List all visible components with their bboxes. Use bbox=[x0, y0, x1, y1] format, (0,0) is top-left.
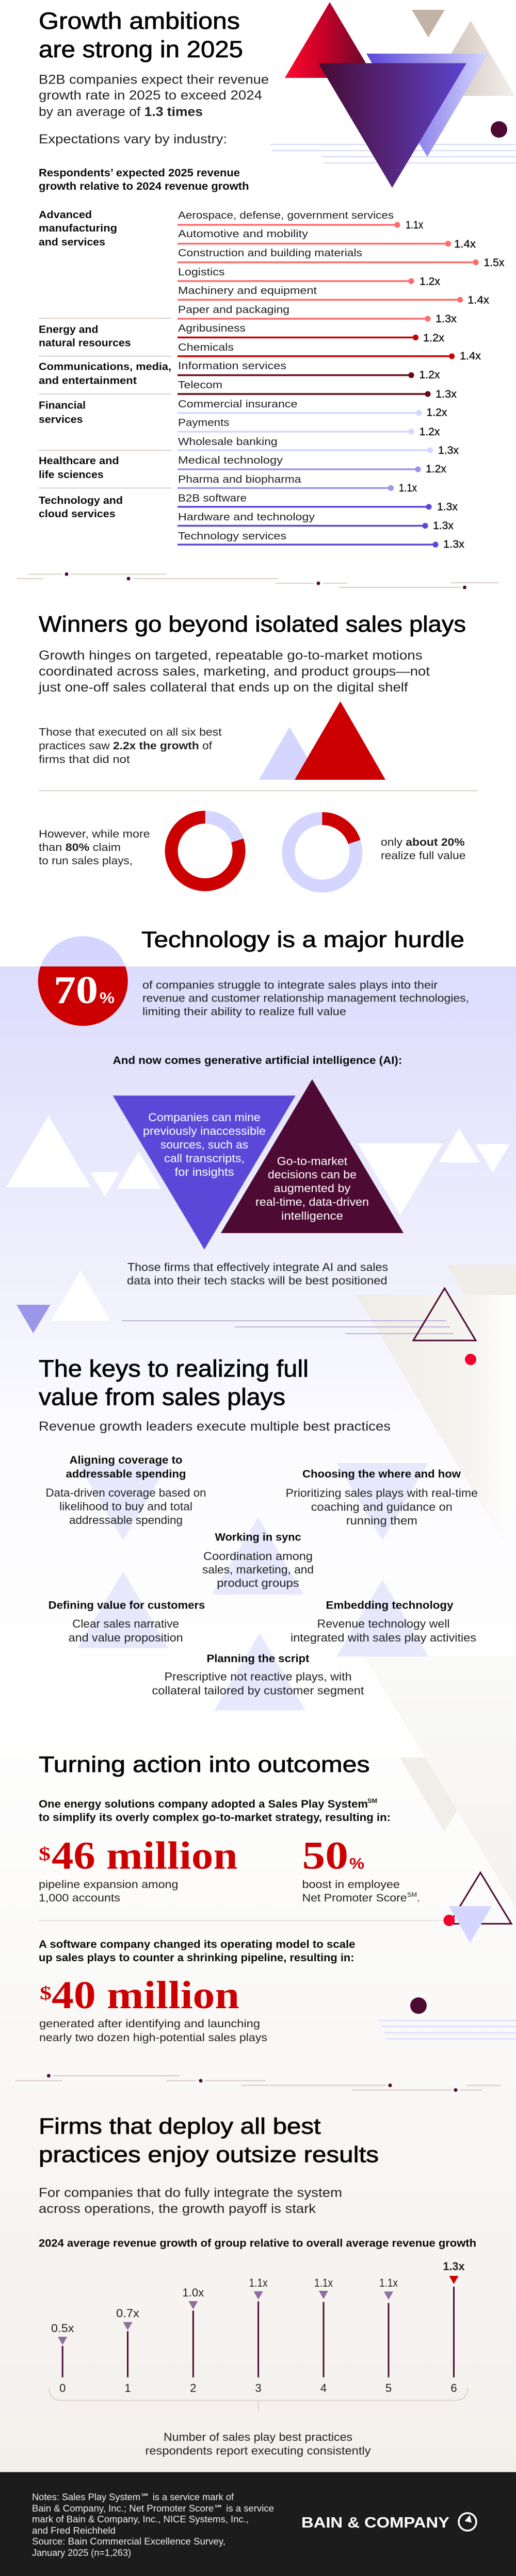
practice: aligning coverage bbox=[45, 1454, 206, 1527]
practice: defining value bbox=[49, 1600, 205, 1644]
triangles: growth comparison bbox=[259, 701, 385, 780]
text: 70 percent explanation: of companies struggle to integrate sales plays into their bbox=[142, 979, 438, 991]
row: chemicals: Chemicals bbox=[178, 342, 234, 353]
industry group labels: Healthcare and bbox=[39, 455, 119, 467]
notes and source: mark of Bain & Company, Inc., NICE Systems, Inc., bbox=[32, 2514, 249, 2524]
stat: 50 percent bbox=[302, 1834, 420, 1904]
decorative triangles and lines bbox=[17, 1271, 476, 1365]
triangle: go-to-market decisions: intelligence bbox=[281, 1209, 343, 1222]
notes and source: Source: Bain Commercial Excellence Survey, bbox=[32, 2536, 225, 2547]
row: pharma: 1.1x bbox=[399, 482, 417, 494]
practice: working in sync: sales, marketing, and bbox=[202, 1563, 314, 1576]
section: winners go beyond bbox=[38, 612, 477, 894]
text: 80% claim: However, while more bbox=[39, 828, 150, 840]
intro text: B2B companies expect their revenue bbox=[39, 72, 269, 87]
row: payments: 1.2x bbox=[419, 426, 440, 438]
intro text bbox=[39, 2186, 342, 2216]
section: keys to full value bbox=[39, 1355, 478, 1711]
row: logistics: Logistics bbox=[178, 267, 225, 278]
row: wholesale banking: 1.3x bbox=[438, 445, 459, 456]
row: hardware: Hardware and technology bbox=[178, 512, 315, 523]
chart heading: growth relative to 2024 revenue growth bbox=[39, 181, 249, 192]
row: automotive: Automotive and mobility bbox=[178, 228, 308, 240]
text: 70 percent explanation bbox=[142, 979, 469, 1018]
row: commercial insurance bbox=[178, 399, 447, 419]
notes and source: and Fred Reichheld bbox=[32, 2525, 116, 2536]
intro text: growth rate in 2025 to exceed 2024 bbox=[39, 88, 262, 103]
row: paper: Paper and packaging bbox=[178, 304, 289, 316]
stat: 40 million: nearly two dozen high-potential sales plays bbox=[39, 2032, 267, 2044]
row: machinery bbox=[178, 285, 490, 306]
row: construction bbox=[178, 248, 505, 269]
practice: choosing where and how: Prioritizing sales plays with real-time bbox=[286, 1487, 478, 1500]
row: technology services bbox=[178, 531, 465, 550]
row: commercial insurance: Commercial insurance bbox=[178, 399, 297, 410]
stat: 46 million: pipeline expansion among bbox=[39, 1879, 178, 1891]
industry group labels: and services bbox=[39, 237, 105, 248]
row: telecom: 1.3x bbox=[436, 388, 457, 400]
text: best positioned: Those firms that effectively integrate AI and sales bbox=[127, 1261, 388, 1274]
column 6 bbox=[443, 2260, 465, 2394]
column 3: 3 bbox=[255, 2382, 262, 2394]
stat: 50 percent: SM bbox=[407, 1891, 417, 1898]
case two intro: A software company changed its operating model to scale bbox=[39, 1939, 355, 1950]
practice: embedding technology: Revenue technology well bbox=[317, 1617, 450, 1630]
text: 2.2x growth bbox=[39, 727, 222, 765]
practice: aligning coverage: Data-driven coverage based on bbox=[45, 1486, 206, 1499]
row: pharma bbox=[178, 474, 417, 494]
text: 2.2x growth: firms that did not bbox=[39, 754, 130, 765]
column 5: 1.1x bbox=[379, 2276, 398, 2289]
stat: 50 percent: % bbox=[349, 1856, 364, 1873]
stat: 46 million: 46 million bbox=[52, 1834, 237, 1878]
industry group labels: Advanced bbox=[39, 209, 92, 221]
70 percent circle: % bbox=[100, 990, 115, 1007]
stat: 40 million: $ bbox=[40, 1983, 52, 2004]
practice: defining value: Defining value for customers bbox=[49, 1600, 205, 1612]
row: payments: Payments bbox=[178, 417, 229, 429]
intro text: by an average of 1.3 times bbox=[39, 105, 203, 119]
row: medical technology: 1.2x bbox=[426, 463, 446, 475]
case one intro: One energy solutions company adopted a Sales Play System bbox=[39, 1798, 368, 1810]
text: 20% realize: only about 20% bbox=[381, 836, 465, 848]
row: construction: Construction and building materials bbox=[178, 248, 362, 259]
industry group labels: manufacturing bbox=[39, 223, 117, 234]
row: payments bbox=[178, 417, 440, 438]
notes and source: Bain & Company, Inc.; Net Promoter Score℠ is a service bbox=[32, 2503, 274, 2514]
triangle: mine sources: for insights bbox=[174, 1166, 234, 1178]
industry group labels: natural resources bbox=[39, 338, 131, 349]
triangle: mine sources: Companies can mine bbox=[148, 1111, 261, 1124]
axis bracket bbox=[49, 2388, 467, 2410]
row: B2B software: 1.3x bbox=[437, 501, 458, 513]
industry group labels bbox=[39, 209, 171, 520]
triangle: mine sources: call transcripts, bbox=[164, 1152, 245, 1164]
axis label bbox=[146, 2431, 370, 2457]
row: telecom bbox=[178, 380, 457, 400]
column 6: 1.3x bbox=[443, 2260, 465, 2273]
practice: planning the script: Planning the script bbox=[206, 1653, 310, 1665]
row: automotive bbox=[178, 228, 476, 250]
background band bbox=[0, 966, 516, 2472]
heading: The keys to realizing full bbox=[39, 1355, 309, 1382]
industry group labels: and entertainment bbox=[39, 375, 137, 387]
row: telecom: Telecom bbox=[178, 380, 222, 391]
row: chemicals bbox=[178, 342, 481, 362]
row: wholesale banking bbox=[178, 436, 459, 456]
row: automotive: 1.4x bbox=[454, 238, 476, 250]
donut: 80 percent bbox=[163, 808, 248, 894]
row: agribusiness: 1.2x bbox=[423, 332, 445, 344]
title: are strong in 2025 bbox=[39, 36, 243, 62]
practice: working in sync bbox=[202, 1532, 314, 1589]
heading bbox=[39, 2113, 379, 2167]
row: aerospace bbox=[178, 210, 423, 231]
lollipop chart: expected growth by industry bbox=[178, 210, 505, 550]
triangle: go-to-market decisions bbox=[221, 1079, 404, 1233]
intro text: across operations, the growth payoff is stark bbox=[39, 2202, 316, 2216]
heading: Winners go beyond isolated sales plays bbox=[39, 612, 466, 637]
row: logistics: 1.2x bbox=[420, 275, 440, 288]
text: 2.2x growth: practices saw 2.2x the growth of bbox=[39, 740, 212, 752]
row: B2B software: B2B software bbox=[178, 493, 247, 504]
heading: value from sales plays bbox=[39, 1384, 285, 1410]
triangle: mine sources bbox=[113, 1095, 296, 1250]
stem chart: growth by best practices bbox=[51, 2260, 465, 2394]
row: wholesale banking: Wholesale banking bbox=[178, 436, 278, 448]
practice: embedding technology: integrated with sales play activities bbox=[291, 1631, 476, 1644]
column 2: 1.0x bbox=[182, 2286, 204, 2299]
column 1 bbox=[116, 2307, 139, 2394]
industry group labels: Communications, media, bbox=[39, 362, 171, 373]
practice: working in sync: Coordination among bbox=[203, 1550, 313, 1563]
decorative triangle group bbox=[444, 1873, 511, 1943]
intro text: Growth hinges on targeted, repeatable go-to-market motions bbox=[39, 648, 423, 663]
notes and source: January 2025 (n=1,263) bbox=[32, 2548, 131, 2558]
stat: 50 percent: 50 bbox=[302, 1834, 348, 1878]
text: 2.2x growth: Those that executed on all six best bbox=[39, 727, 222, 739]
practice: aligning coverage: Aligning coverage to bbox=[69, 1454, 183, 1466]
column 4 bbox=[314, 2276, 333, 2394]
intro text: Expectations vary by industry: bbox=[39, 132, 227, 146]
column 1: 0.7x bbox=[116, 2307, 139, 2320]
triangle: go-to-market decisions: Go-to-market bbox=[277, 1155, 347, 1168]
chart heading: Respondents’ expected 2025 revenue bbox=[39, 167, 240, 179]
stat: 50 percent: Net Promoter Score bbox=[302, 1892, 407, 1904]
column 0: 0.5x bbox=[51, 2322, 74, 2335]
practice: defining value: Clear sales narrative bbox=[72, 1617, 179, 1630]
subheading: Revenue growth leaders execute multiple best practices bbox=[39, 1419, 391, 1434]
donut: 20 percent bbox=[288, 818, 356, 886]
stat: 40 million: 40 million bbox=[52, 1974, 239, 2017]
triangle: mine sources: previously inaccessible bbox=[143, 1125, 266, 1138]
axis label: Number of sales play best practices bbox=[164, 2431, 352, 2443]
notes and source: Notes: Sales Play System℠ is a service mark of bbox=[32, 2492, 234, 2502]
text: best positioned bbox=[127, 1261, 388, 1287]
row: paper bbox=[178, 304, 457, 325]
column 4: 4 bbox=[320, 2382, 327, 2394]
triangle: mine sources: sources, such as bbox=[160, 1138, 248, 1151]
text: 20% realize: realize full value bbox=[381, 850, 465, 862]
background triangles for best practices bbox=[77, 1463, 428, 1711]
row: information services: Information services bbox=[178, 360, 286, 372]
case one intro: to simplify its overly complex go-to-market strategy, resulting in: bbox=[39, 1812, 391, 1824]
stat: 46 million: $ bbox=[39, 1844, 51, 1864]
column 0: 0 bbox=[59, 2382, 66, 2394]
practice: planning the script bbox=[152, 1653, 364, 1697]
row: hardware: 1.3x bbox=[433, 520, 454, 532]
case two intro: up sales plays to counter a shrinking pipeline, resulting in: bbox=[39, 1952, 354, 1964]
axis label: respondents report executing consistently bbox=[146, 2444, 370, 2457]
logo: BAIN & COMPANY bbox=[301, 2515, 449, 2531]
practice: defining value: and value proposition bbox=[69, 1631, 183, 1644]
70 percent circle bbox=[38, 936, 128, 1026]
practice: embedding technology: Embedding technology bbox=[326, 1600, 454, 1612]
row: construction: 1.5x bbox=[484, 257, 505, 269]
industry group labels: life sciences bbox=[39, 469, 104, 481]
column 1: 1 bbox=[124, 2382, 131, 2394]
section: technology hurdle bbox=[6, 927, 510, 1365]
row: medical technology: Medical technology bbox=[178, 455, 283, 466]
practice: choosing where and how: Choosing the where and how bbox=[302, 1468, 461, 1480]
column 5: 5 bbox=[385, 2382, 392, 2394]
heading bbox=[39, 1355, 309, 1410]
row: agribusiness: Agribusiness bbox=[178, 323, 246, 334]
triangle: go-to-market decisions: decisions can be bbox=[268, 1168, 357, 1181]
stat: 46 million bbox=[39, 1834, 237, 1904]
intro text: For companies that do fully integrate the system bbox=[39, 2186, 342, 2200]
column 5 bbox=[379, 2276, 398, 2394]
decorative white triangles bbox=[6, 1115, 510, 1215]
hero triangle graphic bbox=[270, 2, 516, 188]
column 0 bbox=[51, 2322, 74, 2394]
row: pharma: Pharma and biopharma bbox=[178, 474, 301, 485]
heading: Turning action into outcomes bbox=[39, 1752, 370, 1777]
section: growth ambitions bbox=[39, 2, 516, 550]
intro text: coordinated across sales, marketing, and product groups—not bbox=[39, 664, 430, 679]
row: logistics bbox=[178, 267, 440, 288]
row: technology services: Technology services bbox=[178, 531, 286, 542]
practice: planning the script: Prescriptive not reactive plays, with bbox=[164, 1670, 352, 1683]
70 percent circle: 70 bbox=[54, 969, 98, 1012]
case two intro bbox=[39, 1939, 355, 1964]
column 4: 1.1x bbox=[314, 2276, 333, 2289]
practice: working in sync: Working in sync bbox=[215, 1532, 301, 1544]
decorative dot and lines bbox=[379, 1997, 516, 2039]
section: outsize results bbox=[39, 2113, 476, 2457]
industry group labels: services bbox=[39, 414, 83, 425]
practice: planning the script: collateral tailored by customer segment bbox=[152, 1684, 364, 1697]
subheading: generative AI: And now comes generative artificial intelligence (AI): bbox=[113, 1055, 402, 1067]
chart heading: 2024 average revenue growth of group relative to overall average revenue growth bbox=[39, 2237, 476, 2249]
row: technology services: 1.3x bbox=[443, 538, 465, 550]
text: 20% realize bbox=[381, 836, 465, 862]
industry group labels: Energy and bbox=[39, 324, 98, 336]
practice: choosing where and how bbox=[286, 1468, 478, 1527]
stat: 40 million bbox=[39, 1974, 267, 2044]
triangle: go-to-market decisions: augmented by bbox=[274, 1182, 350, 1194]
industry group labels: cloud services bbox=[39, 508, 116, 520]
row: chemicals: 1.4x bbox=[460, 350, 481, 362]
divider decoration with dots bbox=[15, 2074, 501, 2092]
stat: 46 million: 1,000 accounts bbox=[39, 1892, 120, 1904]
decorative background triangles bbox=[356, 1265, 516, 1908]
title bbox=[39, 8, 243, 62]
title: Growth ambitions bbox=[39, 8, 240, 34]
column 3 bbox=[249, 2276, 268, 2394]
industry group labels: Technology and bbox=[39, 495, 123, 506]
column 6: 6 bbox=[450, 2382, 457, 2394]
intro text: just one-off sales collateral that ends up on the digital shelf bbox=[38, 680, 408, 695]
divider decoration with dots bbox=[17, 572, 498, 589]
practice: aligning coverage: addressable spending bbox=[69, 1514, 183, 1527]
row: agribusiness bbox=[178, 323, 445, 344]
row: information services bbox=[178, 360, 440, 381]
heading: Technology is a major hurdle bbox=[141, 927, 464, 952]
case one intro bbox=[39, 1797, 391, 1824]
text: 80% claim bbox=[39, 828, 150, 867]
row: aerospace: 1.1x bbox=[406, 219, 423, 231]
practice: working in sync: product groups bbox=[217, 1577, 299, 1589]
logo bbox=[301, 2513, 476, 2531]
text: 80% claim: to run sales plays, bbox=[39, 855, 133, 867]
row: aerospace: Aerospace, defense, government services bbox=[178, 210, 394, 221]
stat: 50 percent: boost in employee bbox=[302, 1879, 400, 1891]
text: 70 percent explanation: revenue and customer relationship management technologies, bbox=[142, 993, 469, 1005]
row: B2B software bbox=[178, 493, 458, 513]
intro text bbox=[39, 72, 269, 146]
column 2: 2 bbox=[190, 2382, 197, 2394]
practice: embedding technology bbox=[291, 1600, 476, 1644]
heading: practices enjoy outsize results bbox=[39, 2142, 379, 2167]
row: machinery: Machinery and equipment bbox=[178, 285, 317, 297]
text: 70 percent explanation: limiting their ability to realize full value bbox=[142, 1006, 346, 1018]
industry group labels: Financial bbox=[39, 400, 86, 412]
heading: Firms that deploy all best bbox=[39, 2113, 321, 2139]
footer bbox=[0, 2472, 516, 2576]
column 2 bbox=[182, 2286, 204, 2394]
text: best positioned: data into their tech stacks will be best positioned bbox=[127, 1274, 387, 1287]
practice: choosing where and how: running them bbox=[346, 1514, 417, 1527]
stat: 40 million: generated after identifying and launching bbox=[39, 2018, 260, 2030]
row: medical technology bbox=[178, 455, 446, 475]
practice: aligning coverage: likelihood to buy and total bbox=[59, 1500, 192, 1513]
row: paper: 1.3x bbox=[436, 313, 457, 325]
row: hardware bbox=[178, 512, 454, 532]
chart heading bbox=[39, 167, 249, 192]
column 3: 1.1x bbox=[249, 2276, 268, 2289]
case one intro: SM bbox=[367, 1797, 377, 1804]
practice: choosing where and how: coaching and guidance on bbox=[311, 1501, 453, 1514]
text: 80% claim: than 80% claim bbox=[39, 842, 121, 854]
notes and source bbox=[32, 2492, 274, 2558]
section: turning action into outcomes bbox=[39, 1752, 516, 2044]
practice: aligning coverage: addressable spending bbox=[66, 1468, 186, 1480]
row: commercial insurance: 1.2x bbox=[426, 407, 447, 419]
stat: 50 percent: . bbox=[417, 1892, 420, 1904]
row: machinery: 1.4x bbox=[467, 294, 490, 306]
triangle: go-to-market decisions: real-time, data-driven bbox=[255, 1195, 369, 1208]
row: information services: 1.2x bbox=[419, 369, 440, 381]
intro text bbox=[38, 648, 430, 695]
